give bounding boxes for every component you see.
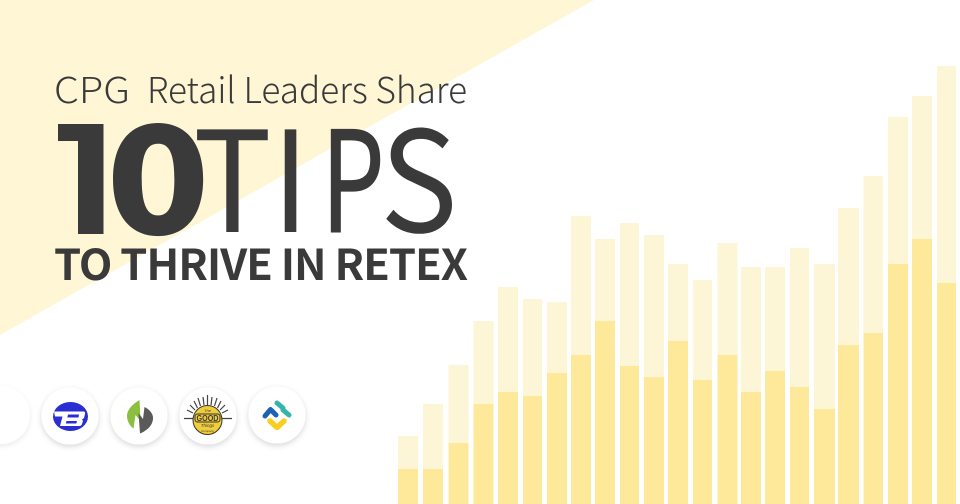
- heading: 10: [58, 123, 204, 236]
- heading: 10: 1: [50, 61, 132, 278]
- heading: 10: 0: [106, 61, 210, 278]
- logo badge: blue teal yellow nodes: [248, 386, 306, 444]
- heading: TIPS: S: [380, 69, 458, 272]
- logo row: [0, 386, 306, 444]
- heading: TIPS: P: [321, 71, 385, 273]
- background triangle: [0, 0, 594, 335]
- logo badge: The Good Things Company sun: [180, 388, 236, 444]
- logo badge: The Good Things Company sun: The: [204, 408, 212, 413]
- heading: TIPS: I: [272, 71, 309, 273]
- heading: TO THRIVE IN RETEX: TO THRIVE IN RETEX: [54, 232, 468, 293]
- heading: CPG Retail Leaders Share: Retail Leaders Share: [147, 62, 467, 114]
- bar chart: [398, 66, 956, 504]
- logo badge: The Good Things Company sun: Things: [201, 423, 215, 428]
- heading: TIPS: T: [193, 70, 272, 273]
- logo badge: partial blank: [0, 386, 30, 444]
- logo badge: green and gray leaf: [110, 388, 168, 444]
- logo badge: The Good Things Company sun: Company: [201, 429, 214, 433]
- logo badge: The Good Things Company sun: GOOD: [196, 414, 219, 423]
- heading: CPG Retail Leaders Share: CPG: [54, 62, 130, 114]
- logo badge: blue B: [42, 388, 98, 444]
- heading: TIPS: [193, 69, 458, 273]
